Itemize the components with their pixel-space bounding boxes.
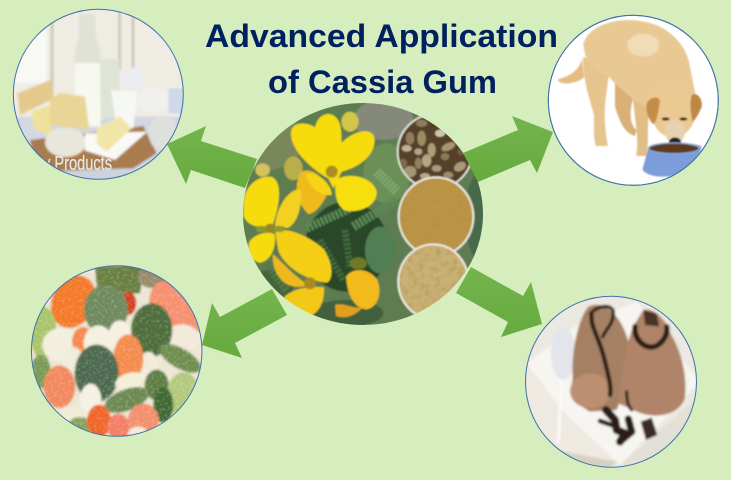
foliage — [267, 172, 397, 290]
flower bud — [335, 257, 379, 317]
arrow: to dairy — [167, 126, 257, 188]
tail — [558, 58, 584, 83]
seed circle: fine powder — [398, 244, 468, 319]
arrow: to ice cream — [456, 267, 542, 337]
spoon — [551, 327, 576, 443]
flower: top — [284, 112, 377, 214]
arrow: to frozen food — [202, 289, 287, 358]
front leg — [633, 97, 651, 156]
bowl — [643, 143, 702, 177]
chocolate sauce — [591, 306, 667, 442]
title — [205, 18, 558, 100]
title: of Cassia Gum — [268, 64, 497, 100]
round white cheese — [45, 128, 86, 157]
panel: frozen vegetables — [30, 265, 202, 437]
butter left — [17, 80, 54, 115]
far hind leg — [615, 83, 636, 136]
title: Advanced Application — [205, 18, 558, 54]
pile — [148, 118, 176, 150]
butter and wrap — [85, 132, 147, 160]
scoop left — [572, 305, 629, 412]
panel: dairy products — [12, 8, 184, 180]
bowl — [138, 87, 170, 113]
yogurt cup — [111, 90, 137, 128]
hind leg — [583, 57, 609, 146]
seed circle: whole pods — [398, 114, 472, 189]
scoop right — [618, 310, 685, 416]
plate — [527, 302, 700, 465]
panel: chocolate ice cream — [525, 296, 697, 468]
head — [653, 97, 694, 136]
swiss cheese — [32, 105, 52, 137]
milk bottle — [74, 14, 100, 63]
product label: y Products — [43, 153, 112, 175]
cheese wedge — [50, 93, 89, 130]
body — [583, 20, 696, 108]
panel: centre cassia plant and seeds — [243, 103, 483, 325]
flower: left — [243, 163, 332, 316]
panel: dog eating pet food — [548, 15, 718, 185]
seed circle: coarse powder — [399, 177, 473, 256]
carrots and vegetables — [49, 274, 96, 330]
arrow: to pet food — [463, 116, 553, 182]
second bottle — [100, 58, 121, 120]
